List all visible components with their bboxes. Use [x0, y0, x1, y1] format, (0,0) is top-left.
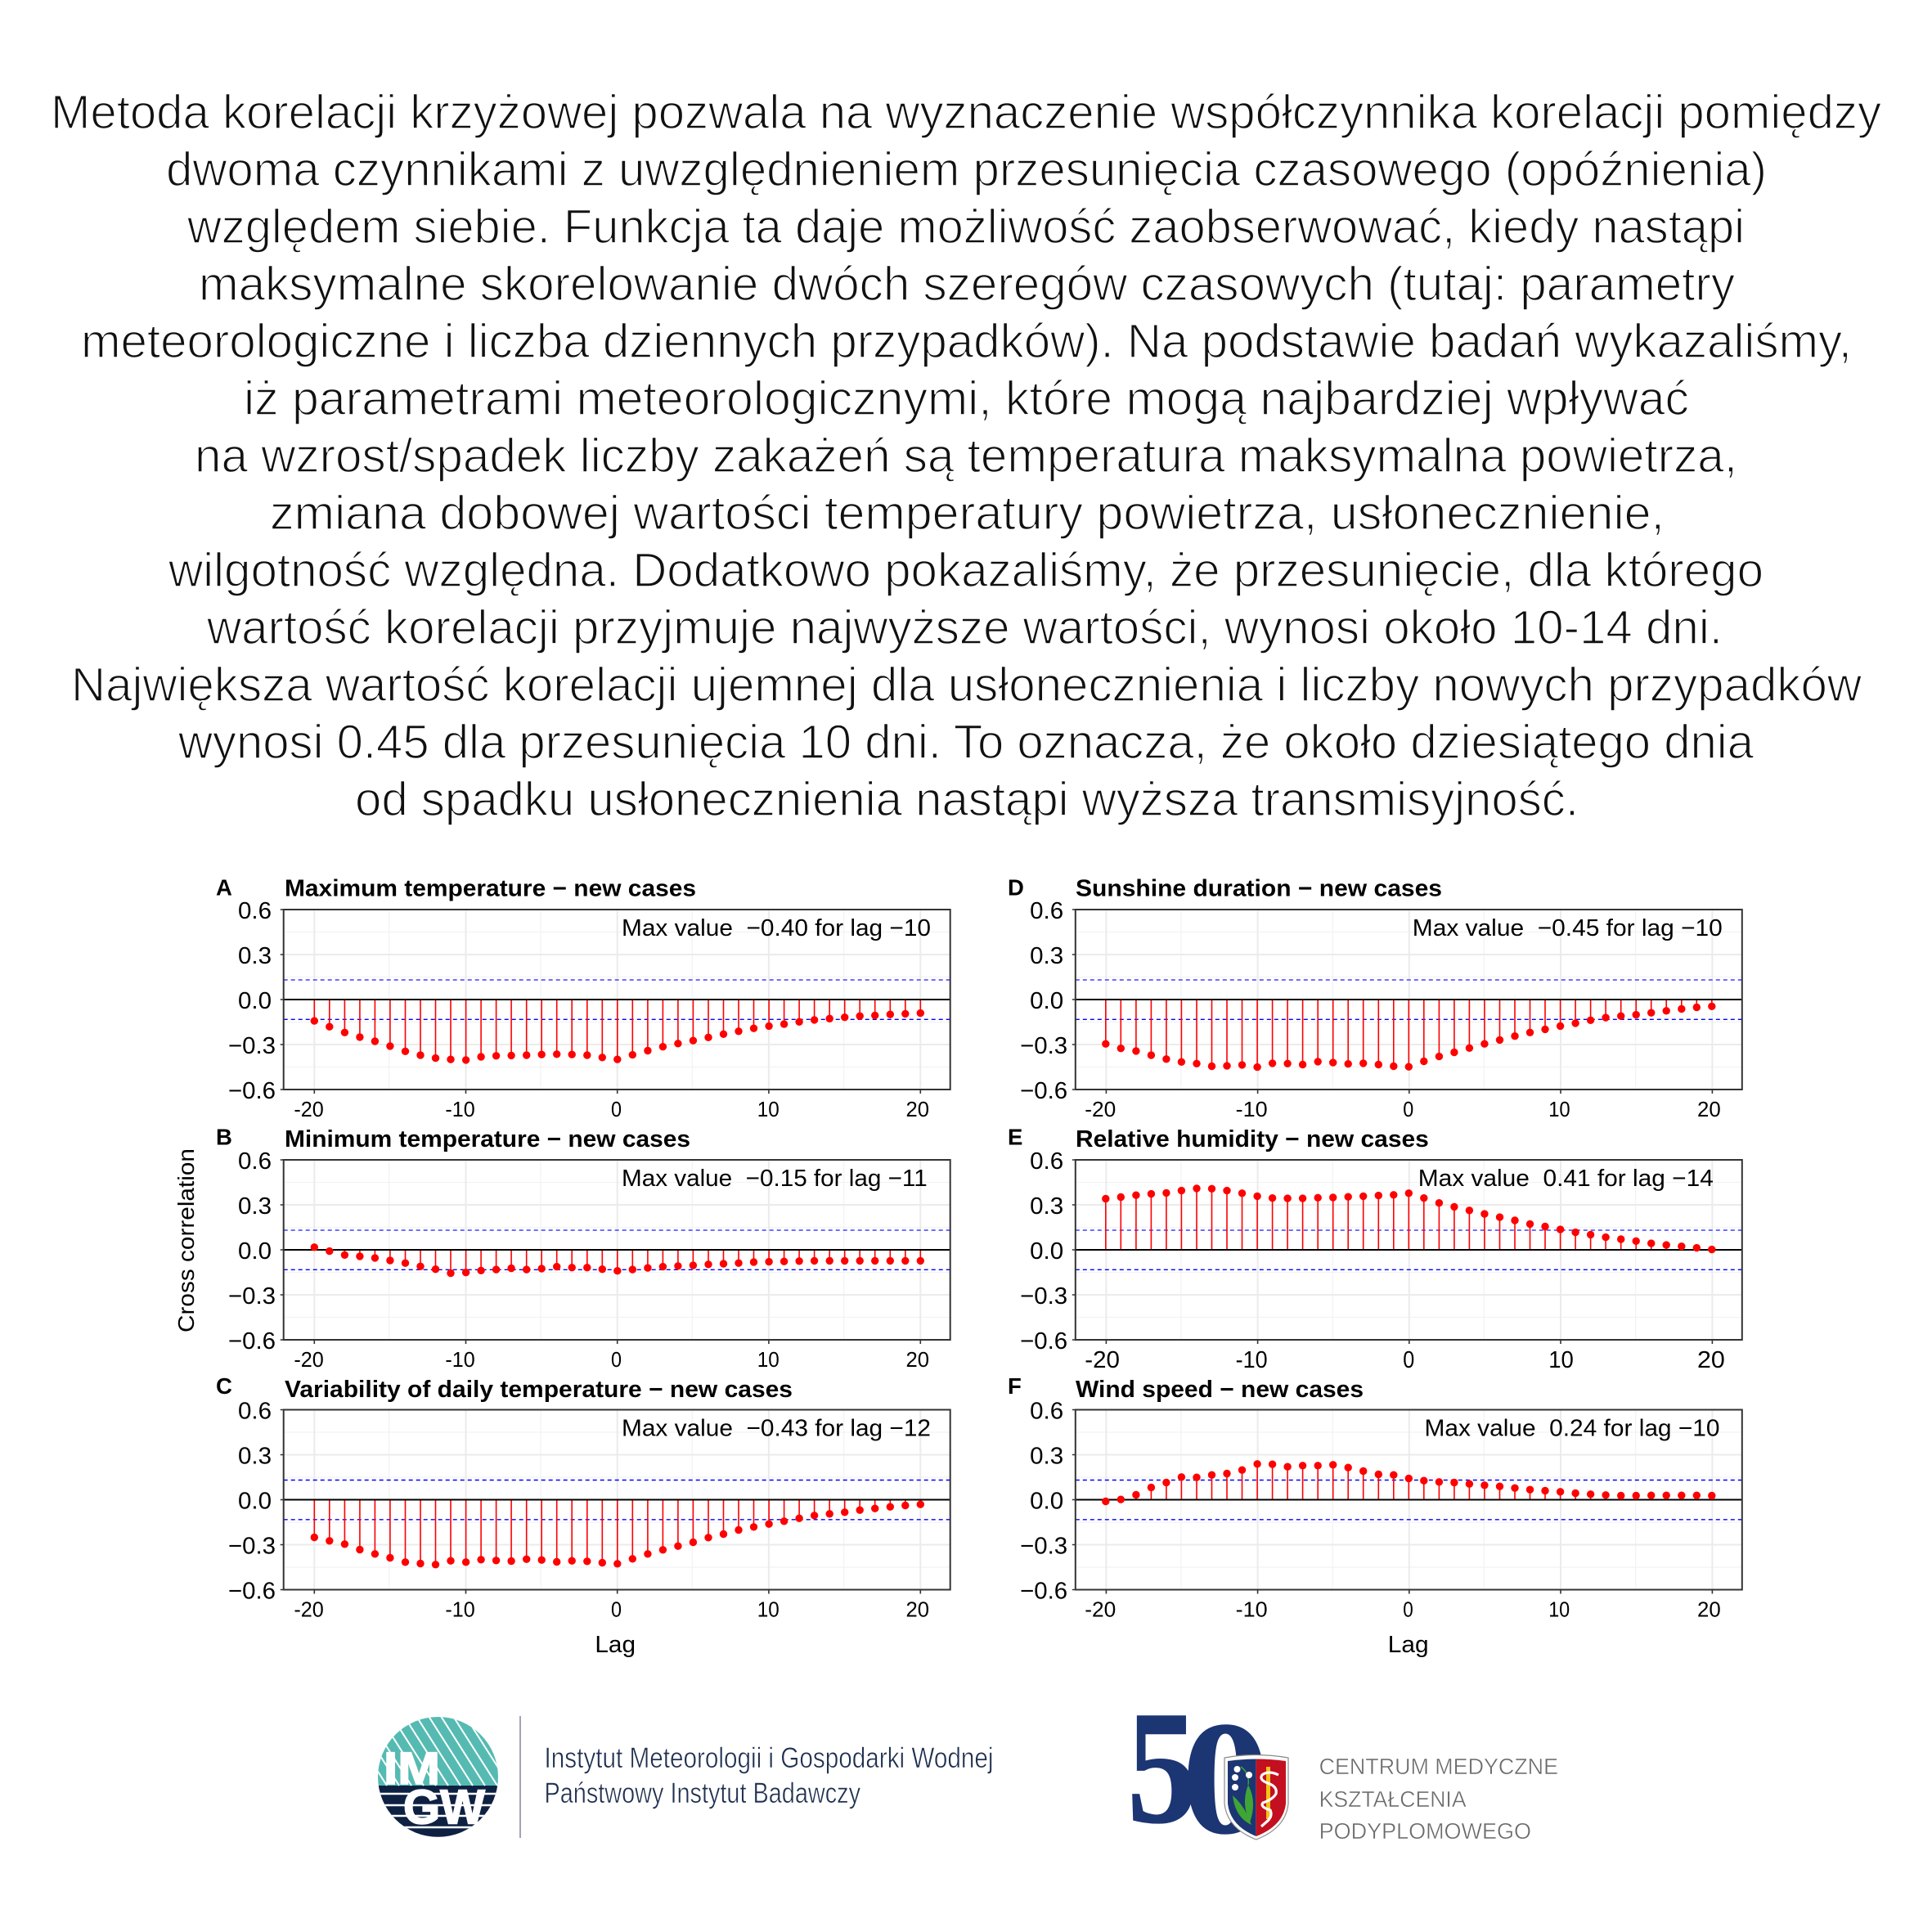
confidence lines E — [1076, 1230, 1742, 1269]
frame D — [1076, 910, 1742, 1090]
y tick labels F: 0.3 — [1030, 1443, 1063, 1469]
x tick labels C — [294, 1598, 929, 1621]
y tick labels E: −0.3 — [1020, 1283, 1067, 1310]
x tick labels E: -20 — [1085, 1347, 1120, 1373]
x tick labels B: 0 — [611, 1349, 622, 1372]
panel letter A: A — [216, 874, 232, 900]
x tick labels D: 0 — [1403, 1099, 1413, 1121]
y tick labels C: 0.0 — [238, 1489, 272, 1515]
x tick labels D: 20 — [1697, 1099, 1721, 1121]
icon: number 50: 5 — [1127, 1678, 1197, 1857]
x tick labels E: -10 — [1236, 1347, 1268, 1373]
y tick labels F — [1020, 1399, 1067, 1605]
y tick labels E: 0.6 — [1030, 1148, 1063, 1175]
y tick labels F: 0.0 — [1030, 1489, 1063, 1515]
x tick labels D: -20 — [1085, 1099, 1116, 1121]
x tick labels F: -10 — [1236, 1598, 1268, 1621]
grid E — [1072, 1160, 1742, 1344]
y tick labels A: 0.6 — [238, 898, 272, 924]
y tick labels A: 0.3 — [238, 943, 272, 969]
panel letter D: D — [1008, 874, 1024, 900]
intro text block: zmiana dobowej wartości temperatury powietrza, usłonecznienie, — [270, 487, 1665, 540]
x tick labels F: 10 — [1548, 1598, 1570, 1621]
CMKP name text: CENTRUM MEDYCZNE — [1319, 1754, 1558, 1779]
logo: IMGW — [341, 1714, 993, 1839]
panel letter E: E — [1008, 1124, 1022, 1150]
IMGW logo letters: IM — [384, 1742, 440, 1794]
intro text block: wartość korelacji przyjmuje najwyższe wartości, wynosi około 10-14 dni. — [206, 601, 1723, 654]
heading A: Maximum temperature − new cases — [285, 875, 696, 901]
confidence lines A — [284, 980, 950, 1019]
panel letter C: C — [216, 1373, 232, 1399]
heading F: Wind speed − new cases — [1076, 1377, 1364, 1403]
x tick labels B: -20 — [294, 1349, 324, 1372]
x tick labels F: 20 — [1697, 1598, 1721, 1621]
confidence lines F — [1076, 1480, 1742, 1520]
y tick labels C: 0.6 — [238, 1399, 272, 1425]
frame C — [284, 1410, 950, 1590]
x tick labels B — [294, 1349, 929, 1372]
x tick labels A: -20 — [294, 1099, 324, 1121]
x tick labels A — [294, 1099, 929, 1121]
dots B — [314, 1247, 920, 1273]
logo divider — [519, 1716, 521, 1838]
heading C: Variability of daily temperature − new cases — [285, 1377, 793, 1403]
y tick labels C: −0.3 — [228, 1533, 276, 1559]
stems B — [314, 1247, 920, 1273]
icon: number 50: 0 — [1182, 1688, 1269, 1867]
y tick labels B: 0.3 — [238, 1193, 272, 1220]
grid B — [281, 1160, 950, 1344]
y tick labels E: 0.0 — [1030, 1238, 1063, 1265]
IMGW name text — [545, 1742, 993, 1809]
dots F — [1106, 1464, 1712, 1502]
y tick labels D: 0.6 — [1030, 898, 1063, 924]
x tick labels D: 10 — [1548, 1099, 1570, 1121]
x tick labels A: -10 — [445, 1099, 475, 1121]
IMGW name text: Państwowy Instytut Badawczy — [545, 1777, 860, 1809]
y tick labels F: 0.6 — [1030, 1399, 1063, 1425]
grid A — [281, 910, 950, 1094]
y tick labels E: 0.3 — [1030, 1193, 1063, 1220]
intro text block: względem siebie. Funkcja ta daje możliwość zaobserwować, kiedy nastąpi — [186, 200, 1745, 254]
frame A — [284, 910, 950, 1090]
y tick labels B — [228, 1148, 276, 1355]
IMGW logo letters — [384, 1742, 485, 1834]
CMKP name text — [1319, 1754, 1558, 1844]
intro text block: Metoda korelacji krzyżowej pozwala na wyznaczenie współczynnika korelacji pomiędzy — [51, 86, 1881, 139]
icon: number 50 — [1127, 1678, 1269, 1867]
y tick labels D: 0.3 — [1030, 943, 1063, 969]
y tick labels F: −0.6 — [1020, 1579, 1067, 1605]
panel letter B: B — [216, 1124, 232, 1150]
intro text block: Największa wartość korelacji ujemnej dla usłonecznienia i liczby nowych przypadków — [71, 658, 1862, 712]
dots A — [314, 1013, 920, 1060]
y tick labels A: 0.0 — [238, 988, 272, 1014]
intro text block: maksymalne skorelowanie dwóch szeregów czasowych (tutaj: parametry — [199, 258, 1735, 311]
x tick labels D: -10 — [1236, 1099, 1268, 1121]
x tick labels B: 10 — [757, 1349, 780, 1372]
intro text block: wilgotność względna. Dodatkowo pokazaliśmy, że przesunięcie, dla którego — [168, 544, 1764, 597]
intro text block: na wzrost/spadek liczby zakażeń są temperatura maksymalna powietrza, — [195, 429, 1737, 483]
heading B: Minimum temperature − new cases — [285, 1126, 690, 1152]
x tick labels B: 20 — [906, 1349, 929, 1372]
icon: shield — [1224, 1755, 1289, 1840]
IMGW logo letters: GW — [403, 1780, 485, 1834]
x tick labels B: -10 — [445, 1349, 475, 1372]
x tick labels F: -20 — [1085, 1598, 1116, 1621]
confidence lines C — [284, 1480, 950, 1520]
IMGW name text: Instytut Meteorologii i Gospodarki Wodnej — [545, 1742, 993, 1774]
panel letter F: F — [1008, 1373, 1022, 1399]
x tick labels A: 0 — [611, 1099, 622, 1121]
y tick labels B: 0.0 — [238, 1238, 272, 1265]
stems D — [1106, 1000, 1712, 1067]
CMKP name text: KSZTAŁCENIA — [1319, 1786, 1467, 1812]
x tick labels D — [1085, 1099, 1721, 1121]
panel A: maximum temperature — [216, 874, 950, 1121]
x tick labels C: -20 — [294, 1598, 324, 1621]
y tick labels B: 0.6 — [238, 1148, 272, 1175]
y tick labels C: 0.3 — [238, 1443, 272, 1469]
grid F — [1072, 1410, 1742, 1593]
intro text block: meteorologiczne i liczba dziennych przypadków). Na podstawie badań wykazaliśmy, — [81, 315, 1852, 368]
CMKP name text: PODYPLOMOWEGO — [1319, 1818, 1531, 1844]
x axis title left: Lag — [595, 1632, 636, 1658]
max value label C: Max value −0.43 for lag −12 — [622, 1415, 931, 1441]
y tick labels E — [1020, 1148, 1067, 1355]
frame B — [284, 1160, 950, 1340]
dots D — [1106, 1006, 1712, 1067]
y tick labels C — [228, 1399, 276, 1605]
grid C — [281, 1410, 950, 1593]
max value label B: Max value −0.15 for lag −11 — [622, 1166, 928, 1192]
max value label F: Max value 0.24 for lag −10 — [1425, 1415, 1720, 1441]
intro text block: wynosi 0.45 dla przesunięcia 10 dni. To oznacza, że około dziesiątego dnia — [177, 716, 1755, 769]
y tick labels F: −0.3 — [1020, 1533, 1067, 1559]
y tick labels A: −0.3 — [228, 1033, 276, 1059]
y tick labels B: −0.3 — [228, 1283, 276, 1310]
panel B: minimum temperature — [216, 1124, 950, 1372]
stems E — [1106, 1188, 1712, 1250]
y tick labels A — [228, 898, 276, 1104]
icon: IMGW circle — [378, 1717, 498, 1837]
stems F — [1106, 1464, 1712, 1502]
dots E — [1106, 1188, 1712, 1250]
x tick labels C: 20 — [906, 1598, 929, 1621]
heading E: Relative humidity − new cases — [1076, 1126, 1429, 1152]
max value label E: Max value 0.41 for lag −14 — [1418, 1166, 1714, 1192]
panel E: relative humidity — [1008, 1124, 1742, 1373]
x tick labels F: 0 — [1403, 1598, 1413, 1621]
y tick labels A: −0.6 — [228, 1078, 276, 1104]
max value label D: Max value −0.45 for lag −10 — [1413, 915, 1723, 941]
x tick labels E — [1085, 1347, 1725, 1373]
y tick labels D: 0.0 — [1030, 988, 1063, 1014]
panel C: variability of daily temperature — [216, 1373, 950, 1658]
x tick labels C: 10 — [757, 1598, 780, 1621]
intro text block: od spadku usłonecznienia nastąpi wyższa transmisyjność. — [355, 773, 1579, 826]
x tick labels E: 0 — [1403, 1347, 1414, 1373]
x tick labels A: 20 — [906, 1099, 929, 1121]
panel D: sunshine duration — [1008, 874, 1742, 1121]
x tick labels F — [1085, 1598, 1721, 1621]
frame E — [1076, 1160, 1742, 1340]
y axis title: Cross correlation — [173, 1148, 199, 1332]
y tick labels D: −0.6 — [1020, 1078, 1067, 1104]
x axis title right: Lag — [1388, 1632, 1429, 1658]
x tick labels C: 0 — [611, 1598, 622, 1621]
y tick labels D — [1020, 898, 1067, 1104]
x tick labels E: 10 — [1548, 1347, 1574, 1373]
stems C — [314, 1500, 920, 1565]
frame F — [1076, 1410, 1742, 1590]
panel F: wind speed — [1008, 1373, 1742, 1658]
x tick labels A: 10 — [757, 1099, 780, 1121]
intro text block: iż parametrami meteorologicznymi, które mogą najbardziej wpływać — [244, 372, 1689, 425]
y tick labels C: −0.6 — [228, 1579, 276, 1605]
logo: CMKP — [1132, 1715, 1557, 1840]
grid D — [1072, 910, 1742, 1094]
x tick labels E: 20 — [1697, 1347, 1725, 1373]
y tick labels B: −0.6 — [228, 1328, 276, 1355]
max value label A: Max value −0.40 for lag −10 — [622, 915, 931, 941]
y tick labels D: −0.3 — [1020, 1033, 1067, 1059]
intro text block: dwoma czynnikami z uwzględnieniem przesunięcia czasowego (opóźnienia) — [166, 143, 1767, 196]
dots C — [314, 1504, 920, 1565]
confidence lines B — [284, 1230, 950, 1269]
stems A — [314, 1000, 920, 1060]
intro text block — [51, 86, 1881, 826]
heading D: Sunshine duration − new cases — [1076, 875, 1442, 901]
y tick labels E: −0.6 — [1020, 1328, 1067, 1355]
confidence lines D — [1076, 980, 1742, 1019]
x tick labels C: -10 — [445, 1598, 475, 1621]
